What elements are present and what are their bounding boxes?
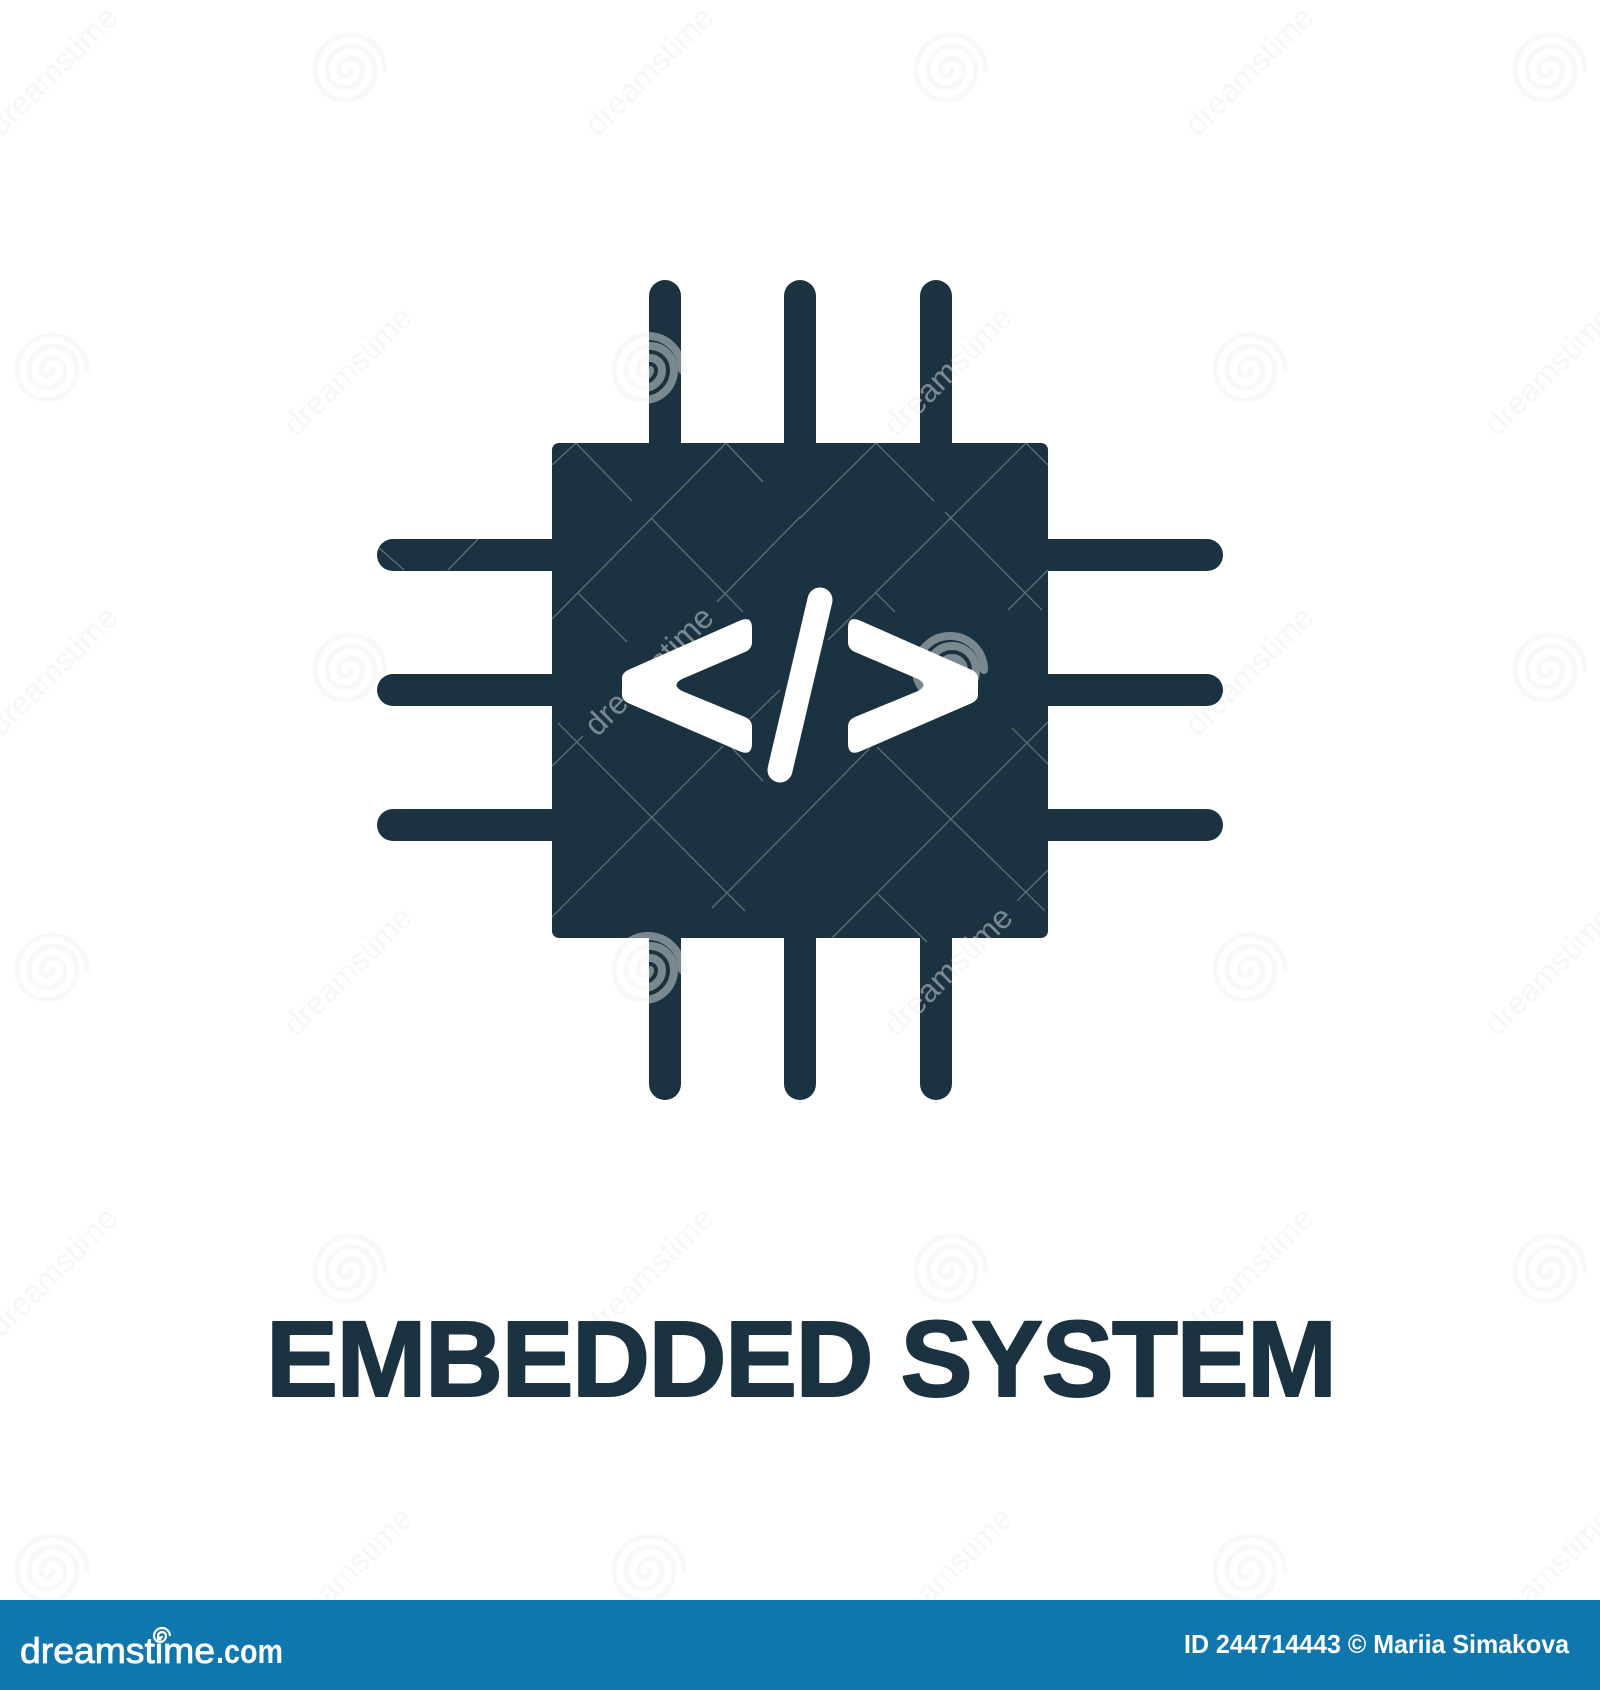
watermark text on white: dreamstime [1177,599,1321,743]
slash [780,600,820,770]
icon: logo spiral [154,1628,170,1642]
watermark text on white: dreamstime [1177,1200,1321,1344]
image credit: ID 244714443 © Mariia Simakova [1184,1629,1570,1659]
chip pins [393,296,1207,1084]
watermark text on white: dreamstime [276,899,420,1043]
watermark text on white: dreamstime [577,1200,721,1344]
watermark text on white: dreamstime [1177,0,1321,143]
watermark overlay on chip: dreamstime [577,599,721,743]
watermark text on white: dreamstime [876,899,1020,1043]
watermark text on white: dreamstime [577,0,721,143]
watermark overlay on chip: dreamstime [876,299,1020,443]
icon: embedded system chip [378,296,1207,1084]
watermark overlay on chip: dreamstime [876,899,1020,1043]
logo text: .com [216,1633,283,1671]
code symbol [622,600,978,770]
right angle bracket [848,619,978,753]
watermark text on white: dreamstime [876,299,1020,443]
watermark text on white: dreamstime [276,299,420,443]
watermark overlay on chip [378,299,1048,1043]
footer banner [0,1600,1600,1690]
logo text: dreamstime [20,1630,215,1671]
chip body [552,443,1048,938]
title: EMBEDDED SYSTEM [266,1298,1337,1419]
watermark text on white: dreamstime [876,1500,1020,1644]
watermark text on white: dreamstime [276,1500,420,1644]
left angle bracket [622,619,752,753]
